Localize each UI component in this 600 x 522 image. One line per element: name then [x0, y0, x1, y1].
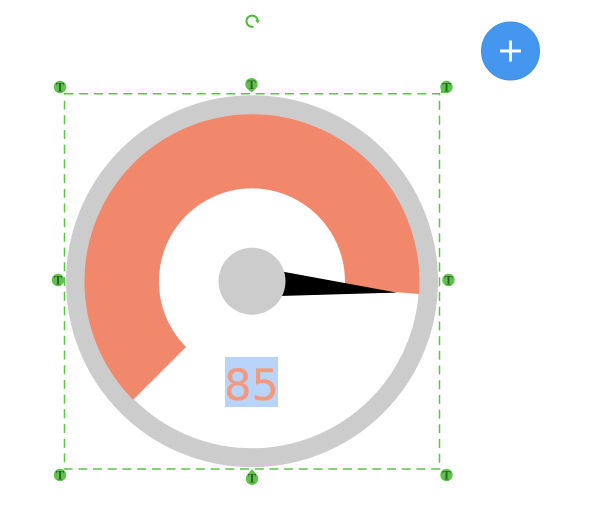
handle: top left: [54, 80, 66, 94]
handle: middle right: [442, 274, 455, 288]
gauge hub: [218, 248, 286, 315]
handle: top middle: T: [247, 78, 256, 92]
handle: top left: T: [56, 80, 65, 94]
handle: bottom left: [54, 468, 66, 482]
add button: [482, 22, 540, 80]
gauge orange value arc: [84, 114, 419, 400]
handle: bottom right: T: [442, 468, 451, 482]
selection box: [64, 94, 440, 469]
gauge outer ring: [76, 105, 428, 458]
icon: plus: [500, 40, 521, 62]
handle: bottom right: [440, 468, 453, 482]
handle: top middle: [245, 78, 258, 92]
handle: middle left: T: [54, 274, 63, 288]
handle: middle left: [52, 274, 64, 288]
resize handles: [52, 78, 455, 486]
handle: top right: [440, 80, 453, 94]
handle: bottom middle: T: [248, 472, 257, 486]
handle: bottom left: T: [56, 468, 65, 482]
icon: rotate handle: [246, 16, 260, 27]
value label: 85: 85: [224, 361, 279, 411]
gauge needle: [280, 272, 397, 296]
handle: top right: T: [442, 80, 451, 94]
handle: middle right: T: [444, 274, 453, 288]
handle: bottom middle: [246, 469, 258, 486]
